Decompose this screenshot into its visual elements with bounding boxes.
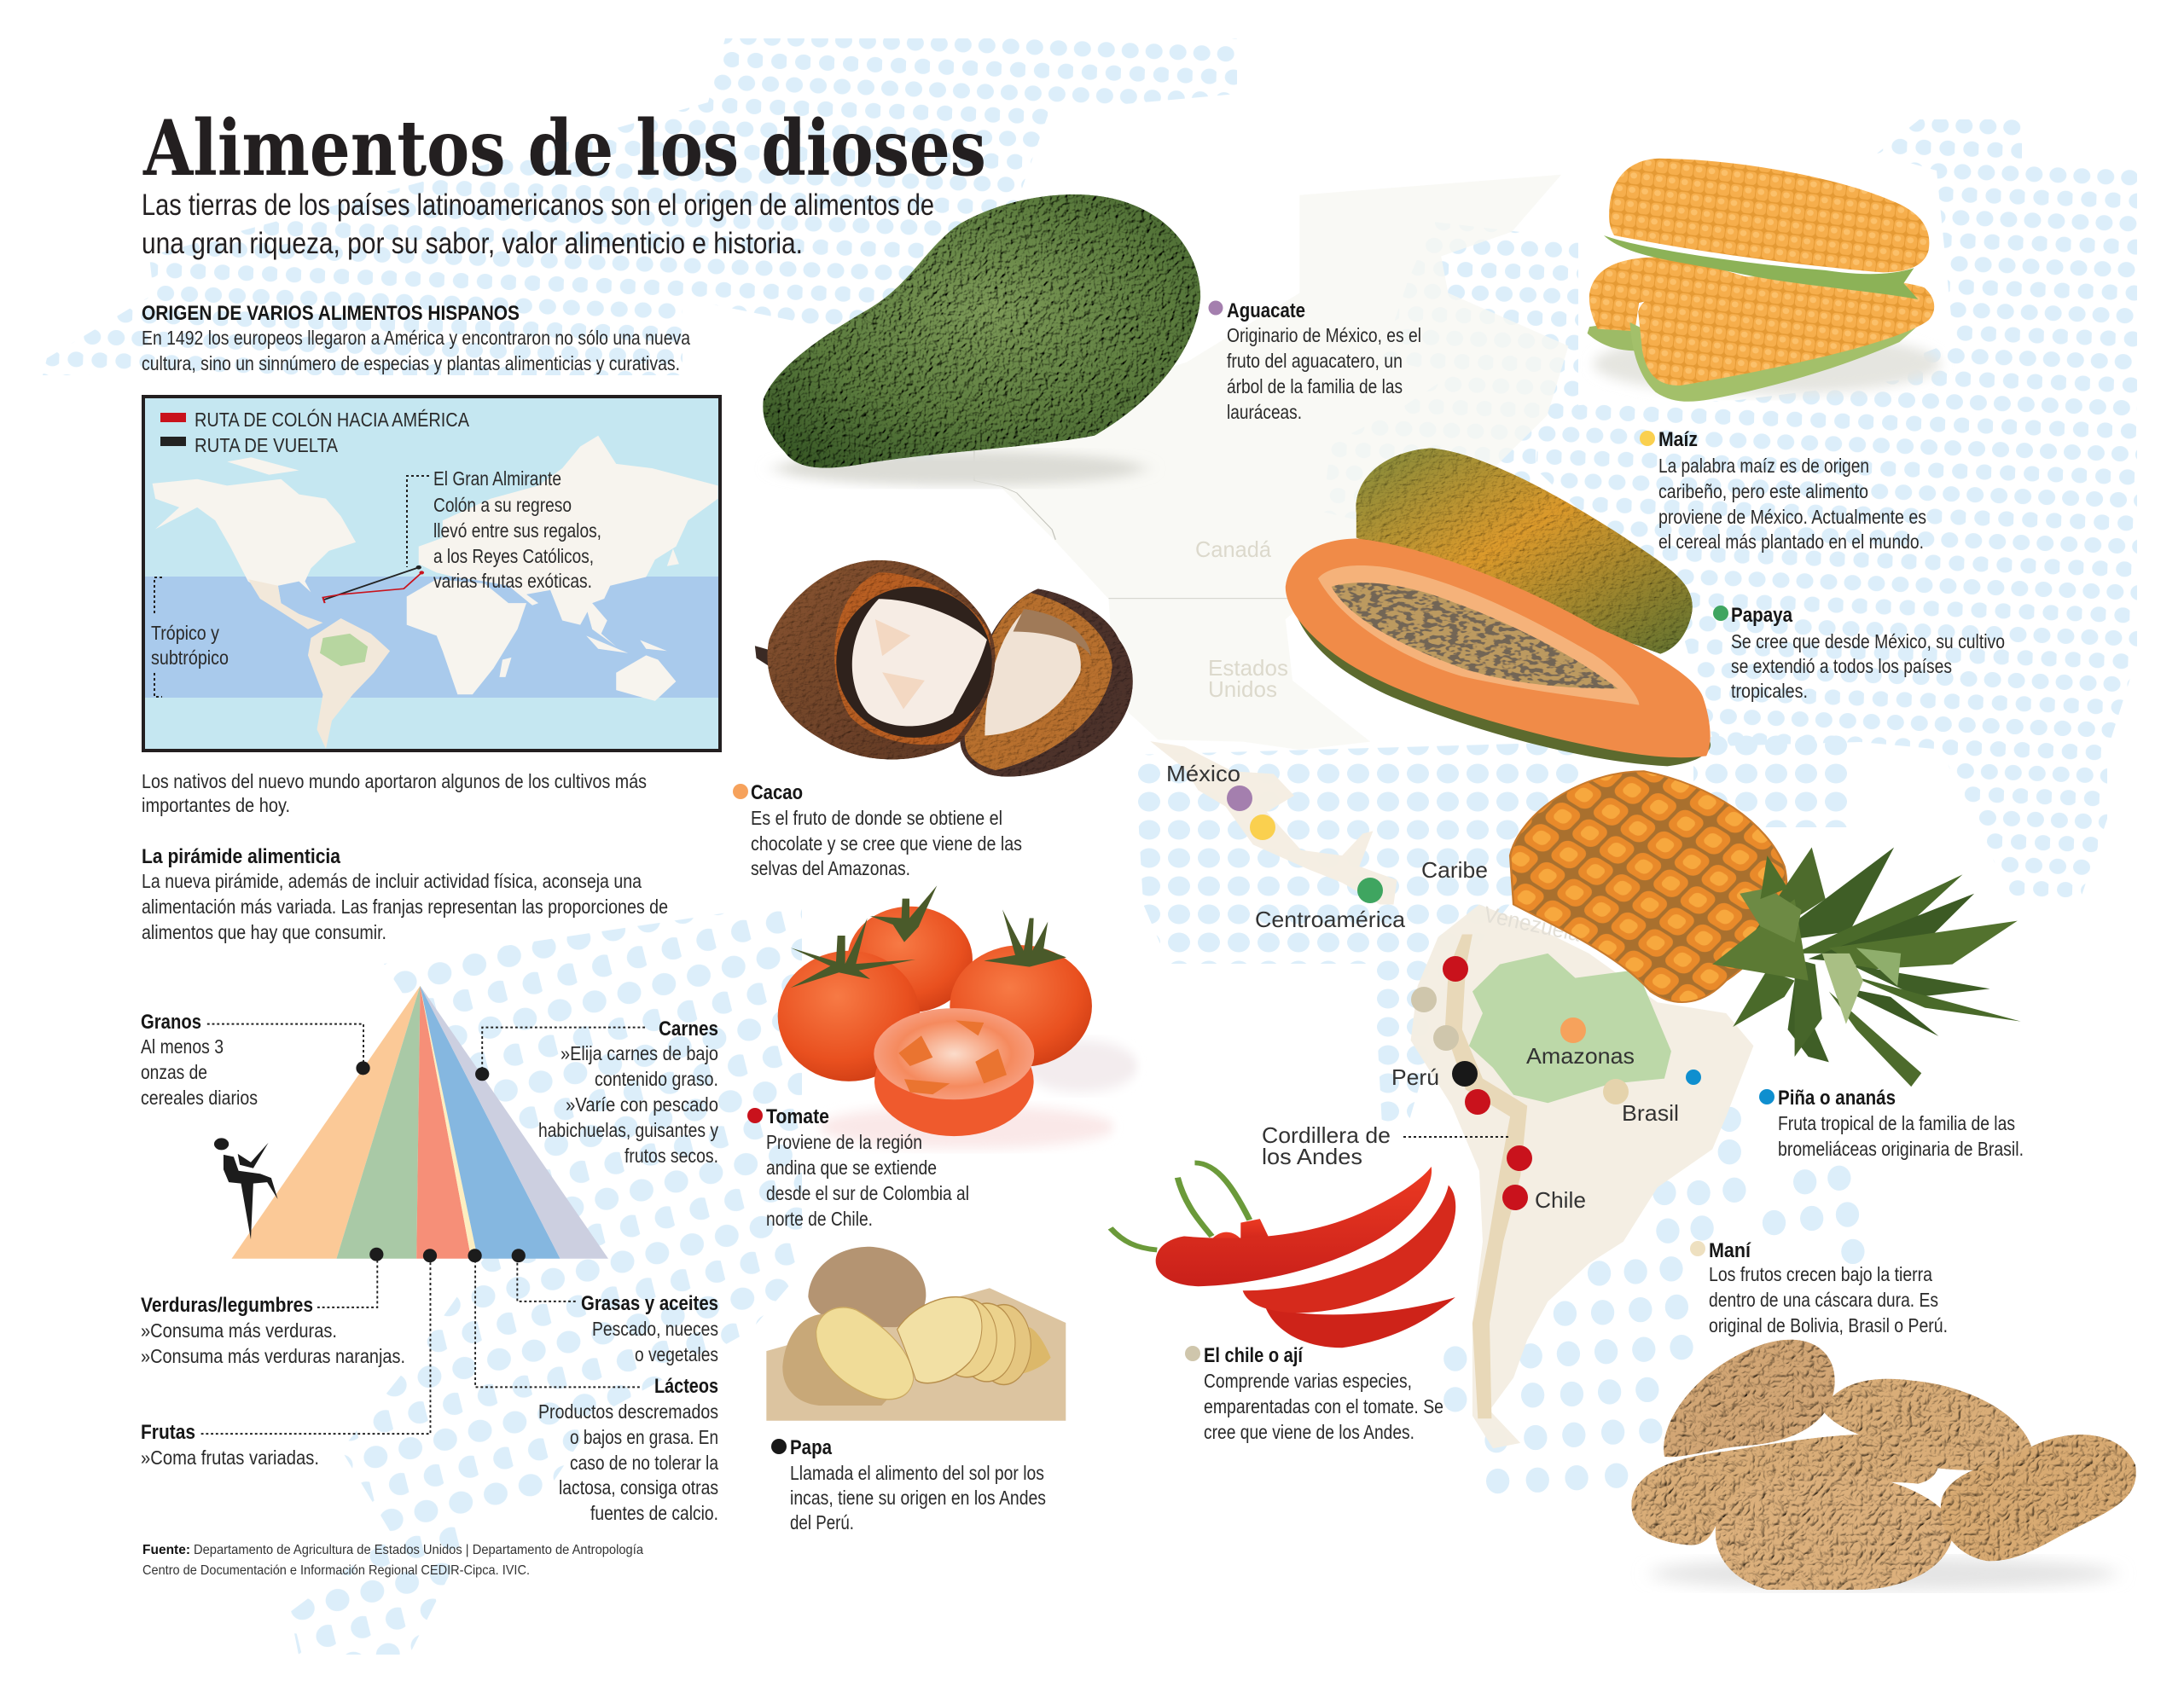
label: Aguacate: Aguacate (1227, 299, 1305, 322)
label: Grasas y aceites (581, 1292, 718, 1365)
label: Verduras: »Consuma más verduras naranjas. (141, 1345, 405, 1367)
label: Tomate: Proviene de la región (766, 1131, 922, 1153)
text: natives: Los nativos del nuevo mundo aportaron algunos de los cultivos más (142, 770, 647, 792)
illustration: chile peppers (1111, 1162, 1455, 1348)
label: Papa: incas, tiene su origen en los Andes (790, 1487, 1046, 1509)
label: Verduras (141, 1294, 405, 1367)
illustration: avocado (763, 194, 1200, 485)
label: Tomate: desde el sur de Colombia al (766, 1182, 969, 1204)
label: Lácteos: o bajos en grasa. En (570, 1426, 718, 1448)
label: Cacao: Es el fruto de donde se obtiene el (751, 807, 1002, 829)
land: Latin America (1150, 741, 1753, 1448)
pyramid markers (356, 1061, 526, 1262)
illustration: cacao (755, 560, 1133, 777)
map labels: Centroamérica (1255, 907, 1406, 932)
intro text block (142, 302, 690, 374)
land: North America (974, 175, 1568, 750)
label: Cacao: Cacao (751, 781, 803, 804)
illustration: peanuts (1631, 1340, 2136, 1590)
tropic label: subtrópico (151, 646, 229, 669)
tomato stems (791, 885, 1066, 988)
label: Papaya: Se cree que desde México, su cultivo (1731, 630, 2005, 652)
label: Chile (1185, 1344, 1443, 1443)
pineapple crown (1712, 848, 2021, 1087)
source note (142, 1543, 643, 1578)
label: Maíz: el cereal más plantado en el mundo. (1658, 530, 1924, 553)
label: Papa: Llamada el alimento del sol por los (790, 1462, 1044, 1484)
illustration: potato (766, 1247, 1066, 1421)
label: Carnes: »Elija carnes de bajo (561, 1042, 718, 1064)
tropic label (151, 577, 229, 697)
label: Grasas y aceites: Grasas y aceites (581, 1292, 718, 1315)
label: Papaya (1713, 604, 2005, 702)
label: Lácteos: lactosa, consiga otras (559, 1476, 718, 1499)
map callout: a los Reyes Católicos, (433, 545, 594, 567)
label: Tomate: andina que se extiende (766, 1157, 937, 1179)
illustration: papaya (1286, 448, 1711, 766)
label: Aguacate: árbol de la familia de las (1227, 375, 1403, 397)
label: Lácteos (538, 1375, 718, 1524)
label: Chile: Comprende varias especies, (1204, 1370, 1412, 1392)
label: Carnes: Carnes (659, 1017, 718, 1041)
panel: world map of Columbus routes (143, 397, 720, 751)
label: Maíz: caribeño, pero este alimento (1658, 480, 1868, 502)
label: Chile: El chile o ají (1204, 1344, 1304, 1367)
text: food pyramid intro: La nueva pirámide, además de incluir actividad física, aconseja una (142, 870, 642, 892)
label: Piña: bromeliáceas originaria de Brasil. (1778, 1138, 2024, 1160)
map labels: Canadá (1195, 536, 1272, 562)
label: Aguacate: fruto del aguacatero, un (1227, 350, 1403, 372)
label: Verduras: »Consuma más verduras. (141, 1319, 337, 1342)
map labels: Brasil (1622, 1100, 1679, 1126)
map labels: Chile (1535, 1187, 1586, 1213)
label: Papaya: se extendió a todos los países (1731, 655, 1952, 677)
label: Lácteos: caso de no tolerar la (570, 1452, 718, 1474)
label: Chile: cree que viene de los Andes. (1204, 1421, 1414, 1443)
label: Granos: onzas de (141, 1061, 207, 1083)
illustration: pineapple (1510, 771, 2021, 1087)
label: Grasas y aceites: o vegetales (635, 1343, 718, 1365)
label: Papa: Papa (790, 1436, 833, 1459)
label: Granos: cereales diarios (141, 1087, 258, 1109)
label: Maní: Maní (1709, 1239, 1751, 1262)
text: natives: importantes de hoy. (142, 794, 290, 816)
map labels: Unidos (1208, 676, 1277, 702)
label: Chile: emparentadas con el tomate. Se (1204, 1395, 1443, 1417)
intro text block: En 1492 los europeos llegaron a América y encontraron no sólo una nueva (142, 327, 690, 349)
label: Maíz: Maíz (1658, 428, 1698, 451)
label: Maíz: La palabra maíz es de origen (1658, 455, 1869, 477)
map legend: RUTA DE VUELTA (195, 434, 339, 456)
pyramid connectors (201, 1024, 645, 1434)
label: Frutas: »Coma frutas variadas. (141, 1446, 319, 1469)
illustration: corn (1588, 159, 1941, 402)
label: Granos: Granos (141, 1011, 201, 1034)
map legend (160, 409, 470, 456)
label: Papaya: Papaya (1731, 604, 1793, 627)
routes (324, 567, 419, 600)
label: Tomate (747, 1105, 969, 1230)
text: food pyramid intro: La pirámide alimenticia (142, 845, 341, 868)
map labels: Caribe (1421, 857, 1488, 883)
label: Carnes (538, 1017, 718, 1167)
label: Granos: Al menos 3 (141, 1035, 224, 1058)
label: Tomate: norte de Chile. (766, 1208, 873, 1230)
map legend: RUTA DE COLÓN HACIA AMÉRICA (195, 409, 470, 431)
map labels: Estados (1208, 655, 1288, 681)
map callout: Colón a su regreso (433, 494, 572, 516)
label: Piña (1759, 1087, 2024, 1160)
label: Aguacate: Originario de México, es el (1227, 324, 1421, 346)
map labels: los Andes (1262, 1144, 1362, 1169)
label: Tomate: Tomate (766, 1105, 829, 1128)
text: food pyramid intro: alimentos que hay que consumir. (142, 921, 386, 943)
label: Aguacate (1208, 299, 1421, 423)
label: Cacao: chocolate y se cree que viene de las (751, 832, 1022, 855)
map dots (1227, 786, 1701, 1210)
label: Lácteos: fuentes de calcio. (590, 1502, 718, 1524)
intro text block: ORIGEN DE VARIOS ALIMENTOS HISPANOS (142, 302, 520, 325)
map labels: Venezuela (1482, 901, 1583, 947)
label: Maní: Los frutos crecen bajo la tierra (1709, 1263, 1932, 1285)
source note: Centro de Documentación e Información Regional CEDIR-Cipca. IVIC. (142, 1563, 530, 1578)
pyramid labels (141, 1011, 718, 1524)
label: Lácteos: Productos descremados (538, 1400, 718, 1423)
map callout: El Gran Almirante (433, 467, 561, 490)
label: Frutas: Frutas (141, 1421, 195, 1444)
label: Papa: del Perú. (790, 1511, 854, 1533)
label: Carnes: contenido graso. (595, 1068, 718, 1090)
label: Verduras: Verduras/legumbres (141, 1294, 313, 1317)
label: Piña: Piña o ananás (1778, 1087, 1896, 1110)
label: Papaya: tropicales. (1731, 680, 1808, 702)
map callout (407, 467, 601, 592)
label: Piña: Fruta tropical de la familia de las (1778, 1112, 2015, 1134)
label: Grasas y aceites: Pescado, nueces (592, 1318, 718, 1340)
text: food pyramid intro (142, 845, 668, 943)
label: Maíz (1640, 428, 1926, 553)
southern dots (1443, 1107, 1865, 1493)
label: Maní: original de Bolivia, Brasil o Perú. (1709, 1314, 1948, 1336)
map: Americas (974, 175, 1753, 1448)
tropic label: Trópico y (151, 622, 219, 644)
label: Carnes: frutos secos. (624, 1145, 718, 1167)
label: Aguacate: lauráceas. (1227, 401, 1302, 423)
subtitle: una gran riqueza, por su sabor, valor alimenticio e historia. (142, 227, 803, 260)
label: Carnes: »Varíe con pescado (566, 1093, 718, 1116)
map labels: México (1166, 761, 1240, 786)
label: Frutas (141, 1421, 319, 1469)
map labels: Cordillera de (1262, 1122, 1391, 1148)
label: Maní (1690, 1239, 1948, 1336)
source note: Fuente: (142, 1543, 190, 1557)
map callout: varias frutas exóticas. (433, 570, 592, 592)
label: Maíz: proviene de México. Actualmente es (1658, 506, 1926, 528)
label: Papa (771, 1436, 1046, 1533)
label: Carnes: habichuelas, guisantes y (538, 1119, 718, 1141)
subtitle: Las tierras de los países latinoamericanos son el origen de alimentos de (142, 188, 934, 222)
label: Maní: dentro de una cáscara dura. Es (1709, 1289, 1938, 1311)
world land masses (153, 436, 717, 749)
text: food pyramid intro: alimentación más variada. Las franjas representan las proporciones de (142, 896, 668, 918)
source note: Departamento de Agricultura de Estados Unidos | Departamento de Antropología (194, 1543, 643, 1557)
illustration: tomatoes (778, 885, 1137, 1149)
label: Granos (141, 1011, 258, 1109)
intro text block: cultura, sino un sinnúmero de especias y plantas alimenticias y curativas. (142, 352, 680, 374)
map callout: llevó entre sus regalos, (433, 519, 601, 542)
icon: running figure (214, 1138, 278, 1239)
label: Lácteos: Lácteos (654, 1375, 718, 1398)
map labels: Perú (1391, 1064, 1439, 1090)
subtitle (142, 188, 934, 260)
map labels: Amazonas (1526, 1043, 1635, 1069)
map labels (1166, 536, 1679, 1213)
text: natives (142, 770, 647, 816)
title: Alimentos de los dioses (142, 103, 986, 194)
chart: food pyramid (201, 986, 645, 1434)
label: Cacao: selvas del Amazonas. (751, 857, 910, 879)
label: Cacao (733, 781, 1022, 879)
